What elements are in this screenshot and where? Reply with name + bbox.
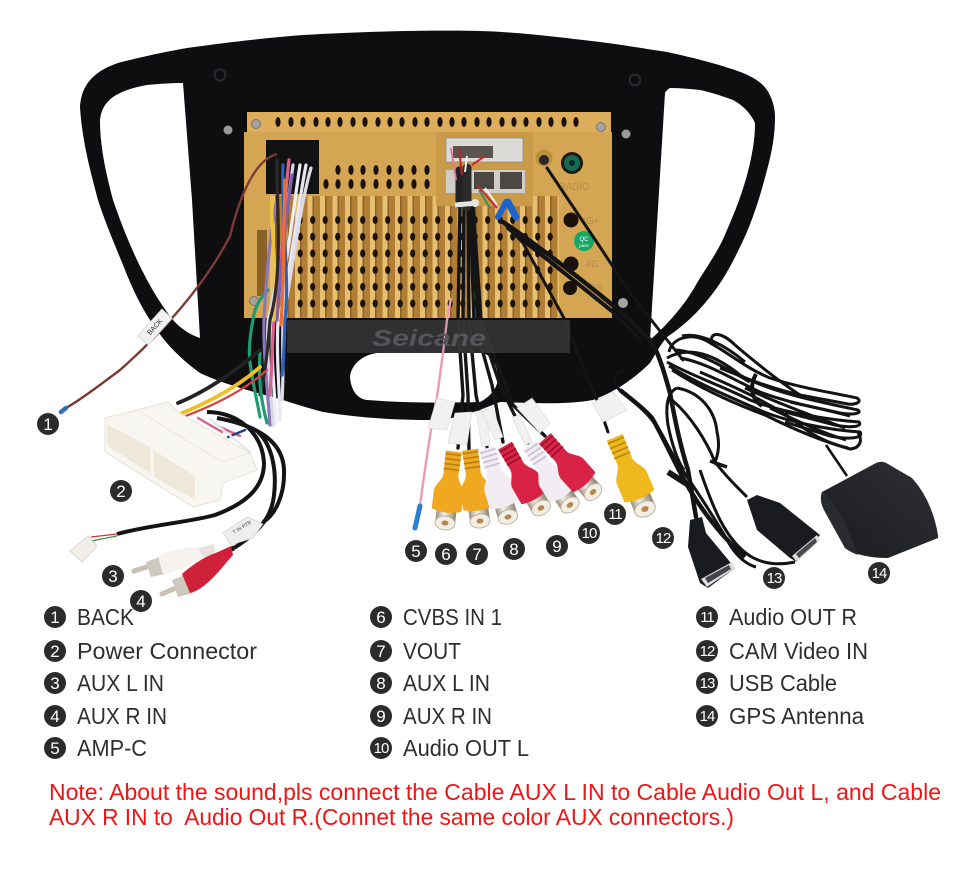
- number markers on the photo: 3: [108, 567, 118, 586]
- number markers on the photo: 5: [411, 542, 421, 561]
- legend column 3: 12: [700, 643, 715, 660]
- cable label tags: [428, 392, 627, 447]
- radio ports and stickers: [536, 150, 603, 295]
- legend column 2: VOUT: [403, 638, 461, 664]
- connector: USB plug 2: [747, 495, 820, 562]
- RCA female connector: CVBS IN 1 (yellow): [429, 450, 469, 532]
- wires: power harness bundle: [178, 160, 311, 452]
- connectors: harness sockets on chassis: [266, 138, 525, 194]
- RCA female connector: AUX L IN (white): [473, 444, 524, 528]
- number markers on the photo: 6: [441, 545, 451, 564]
- USB cable loops: [615, 370, 795, 567]
- legend column 2: CVBS IN 1: [403, 604, 502, 630]
- legend column 2: AUX R IN: [403, 703, 492, 729]
- legend column 1: [44, 604, 257, 761]
- wire: AMP-C pink lead: [415, 298, 451, 528]
- connector: white RCA plug: [134, 544, 216, 577]
- RCA female connector: Audio OUT L (white): [517, 437, 586, 519]
- RCA female connector: AUX R IN (red): [492, 438, 557, 522]
- legend column 3: Audio OUT R: [729, 604, 857, 630]
- legend column 1: AUX R IN: [77, 703, 167, 729]
- legend column 2: 8: [376, 674, 386, 693]
- note: Note: About the sound,pls connect the Cable AUX L IN to Cable Audio Out L, and Cable: [49, 779, 941, 805]
- GPS cable coil: [667, 334, 861, 476]
- GPS antenna: [821, 462, 938, 558]
- number markers on the photo: 4: [136, 592, 146, 611]
- legend column 1: AMP-C: [77, 735, 147, 761]
- legend column 2: Audio OUT L: [403, 735, 529, 761]
- legend column 1: AUX L IN: [77, 670, 164, 696]
- legend column 1: 4: [50, 707, 60, 726]
- number markers on the photo: 14: [872, 565, 887, 582]
- frame screw bosses and mounting screws: [214, 70, 640, 308]
- legend column 1: Power Connector: [77, 638, 257, 664]
- translucent watermark band with Seicane logo: Seicane: [372, 325, 486, 351]
- radio ports and stickers: 4G+: [580, 216, 600, 227]
- number markers on the photo: 9: [552, 537, 562, 556]
- panel: gold radio chassis: [244, 112, 612, 318]
- RCA female connector: CAM Video IN (yellow): [600, 431, 663, 522]
- RCA female connector: VOUT (yellow): [455, 448, 496, 530]
- wire tie and blue clips: [455, 199, 516, 217]
- legend column 2: AUX L IN: [403, 670, 490, 696]
- radio ports and stickers: RADIO: [558, 182, 590, 193]
- note: AUX R IN to Audio Out R.(Connet the same color AUX connectors.): [49, 804, 734, 830]
- number markers on the photo: 12: [656, 530, 671, 547]
- legend column 3: GPS Antenna: [729, 703, 864, 729]
- legend column 2: 10: [374, 740, 389, 757]
- wires into upper socket: [451, 148, 497, 208]
- number markers on the photo: 8: [509, 540, 519, 559]
- legend column 2: 6: [376, 608, 386, 627]
- radio ports and stickers: pass: [579, 243, 589, 248]
- radio ports and stickers: 4G: [585, 259, 599, 270]
- number markers on the photo: 7: [472, 545, 482, 564]
- label tag on AUX cable: [223, 517, 263, 545]
- wires: centre bundle: [458, 168, 545, 450]
- connector: USB plug 1: [688, 517, 735, 588]
- cables: right-side black cables: [503, 168, 696, 517]
- radio ports and stickers: QC: [580, 237, 589, 243]
- RCA female connector: Audio OUT R (red): [534, 428, 609, 507]
- legend column 2: 9: [376, 707, 386, 726]
- connector: red RCA plug: [162, 546, 233, 597]
- legend column 2: [370, 604, 529, 761]
- power connector: [105, 402, 257, 507]
- label tag on AUX cable: T IN RTB: [232, 519, 253, 536]
- number markers on the photo: 2: [116, 482, 126, 501]
- number markers on the photo: 1: [43, 415, 53, 434]
- legend column 3: 14: [700, 708, 715, 725]
- legend column 3: 13: [700, 675, 715, 692]
- cables: AUX and small connector: [91, 412, 284, 556]
- legend column 3: USB Cable: [729, 670, 837, 696]
- legend column 2: 7: [376, 642, 386, 661]
- wire: BACK lead: BACK: [146, 318, 165, 337]
- note: [49, 779, 941, 830]
- legend column 3: [696, 604, 868, 729]
- legend column 1: 3: [50, 674, 60, 693]
- legend column 1: 1: [50, 608, 60, 627]
- legend column 3: CAM Video IN: [729, 638, 868, 664]
- small white plug: [70, 536, 97, 562]
- wire: BACK lead: [61, 154, 277, 412]
- radio ports and stickers: GPS: [581, 283, 603, 294]
- legend column 3: 11: [700, 609, 714, 626]
- frame: black radio fascia: [80, 31, 775, 420]
- legend column 1: BACK: [77, 604, 135, 630]
- number markers on the photo: 13: [767, 570, 782, 587]
- legend column 1: 5: [50, 739, 60, 758]
- number markers on the photo: [37, 413, 890, 612]
- number markers on the photo: 10: [582, 525, 597, 542]
- legend column 1: 2: [50, 642, 60, 661]
- number markers on the photo: 11: [608, 506, 622, 523]
- translucent watermark band with Seicane logo: [287, 320, 570, 353]
